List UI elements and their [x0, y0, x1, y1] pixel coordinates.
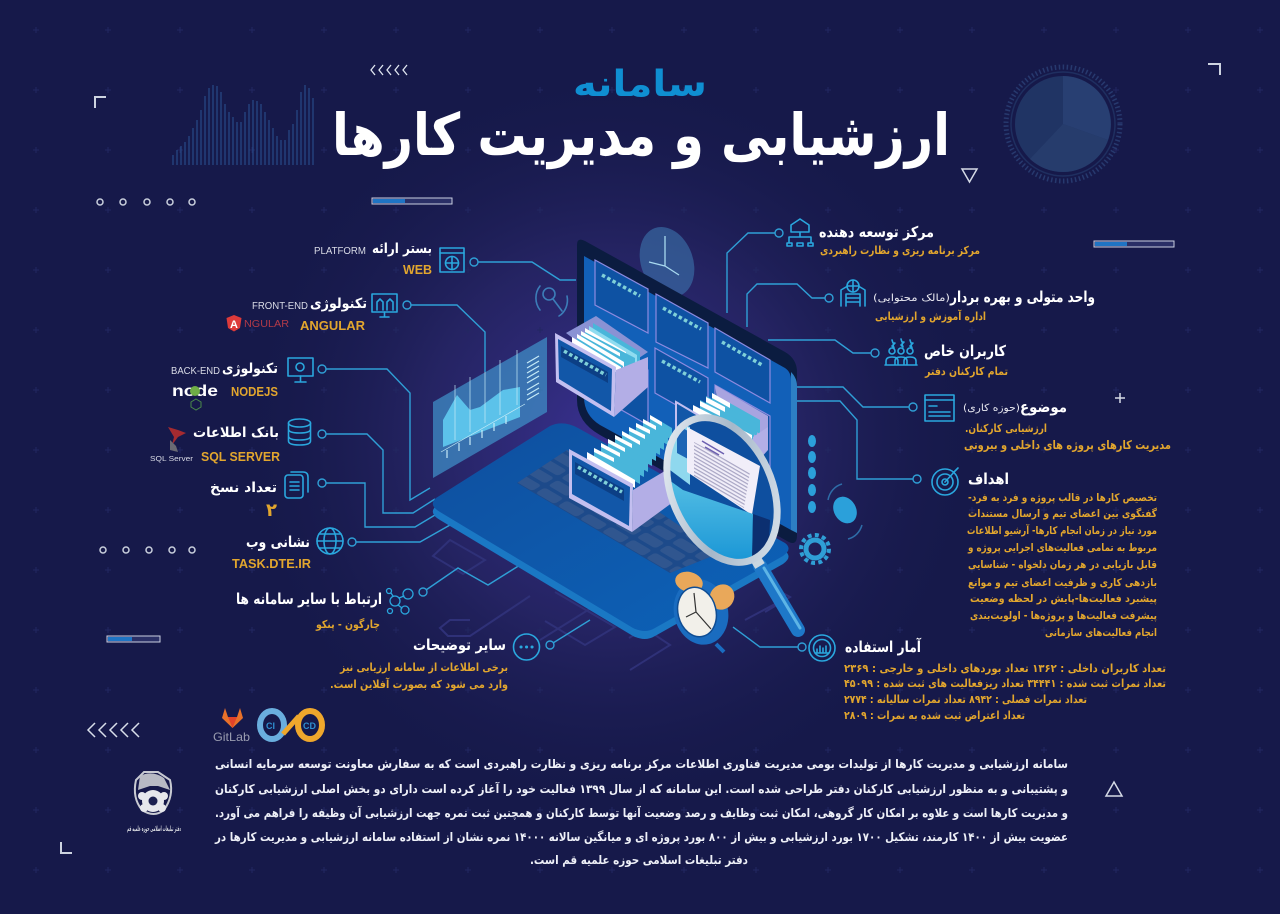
item: usage stats [809, 635, 1166, 722]
icon: documents [285, 472, 308, 498]
icon: dots circle [514, 634, 540, 660]
decorative progress bar right [1094, 241, 1174, 247]
item: front-end: تکنولوژی [310, 296, 367, 312]
magnifier handle [754, 556, 800, 630]
item: subject [925, 395, 1171, 453]
item: integration: چارگون - پنکو [315, 618, 380, 631]
decorative pie gauge [1006, 67, 1120, 181]
decorative corner top left [95, 97, 106, 108]
item: other notes: وارد می شود که بصورت آفلاین است. [330, 677, 508, 691]
item: developer center: مرکز برنامه ریزی و نظارت راهبردی [820, 244, 980, 257]
keyboard [517, 450, 720, 573]
logo: gitlab: GitLab [213, 730, 250, 744]
decorative triangle [962, 169, 977, 182]
goals text [967, 492, 1158, 639]
body paragraph [214, 757, 1068, 868]
title: main: ارزشیابی و مدیریت کارها [332, 101, 950, 170]
item: versions: تعداد نسخ [210, 480, 277, 496]
item: versions: ۲ [266, 500, 277, 521]
item: platform: بستر ارائه [372, 241, 432, 257]
goals text: مربوط به تمامی فعالیت‌های اجرایی پروژه و [967, 542, 1157, 554]
item: other notes: سایر توضیحات [413, 636, 506, 654]
body paragraph: و پشتیبانی و به منظور ارزشیابی کارکنان دفتر طراحی شده است. این سامانه که از سال ۱۳۹۹ فعالیت خود را آغاز کرده است دارای دو بخش اصلی ارزشیابی کارکنان [215, 781, 1068, 797]
item: goals [932, 468, 1158, 639]
item: subject: ارزشیابی کارکنان. [965, 422, 1047, 435]
magnifier lens [663, 414, 781, 566]
item: database: SQL SERVER [201, 449, 281, 464]
item: owner unit: اداره آموزش و ارزشیابی [875, 309, 986, 323]
item: web address: TASK.DTE.IR [232, 556, 312, 571]
logo: angular [226, 315, 289, 332]
item: platform [314, 241, 464, 277]
goals text: مورد نیاز در زمان انجام کارها- آرشیو اطلاعات [967, 524, 1157, 537]
item: usage stats: آمار استفاده [845, 638, 922, 656]
decorative gear [801, 535, 829, 563]
decorative chevrons lower [88, 723, 139, 737]
item: owner unit: (مالک محتوایی) [873, 293, 950, 304]
body paragraph: عضویت بیش از ۱۴۰۰ کارمند، تشکیل ۱۷۰۰ بورد ارزشیابی و بیش از ۸۰۰ بورد پروژه ای و میانگین سالانه ۱۴۰۰۰ نمره نشان از استفاده سامانه ارزشیابی و مدیریت کارها در [214, 830, 1068, 845]
decorative corner top right [1208, 64, 1220, 75]
wall clock [630, 219, 704, 305]
item: back-end [171, 358, 313, 410]
item: back-end: BACK-END [171, 366, 220, 377]
goals text: بازدهی کاری و ظرفیت اعضای تیم و موانع [968, 577, 1157, 589]
logo: seminary emblem [127, 772, 181, 833]
logo: angular: NGULAR [244, 319, 289, 330]
icon: target [932, 468, 958, 495]
item: subject: موضوع [1020, 398, 1067, 416]
chart panel [433, 337, 547, 478]
icon: stats dial [809, 635, 835, 661]
laptop [433, 240, 800, 652]
goals text: تخصیص کارها در قالب پروژه و فرد به فرد- [968, 492, 1157, 504]
body paragraph: و مدیریت کارها است و علاوه بر امکان کار گروهی، امکان ثبت وظایف و رصد وضعیت آنها توسط کارکنان و همچنین ثبت نمره جهت ارزشیابی آن وظیفه را فراهم می آورد. [215, 805, 1068, 821]
decorative dots top [97, 199, 195, 205]
item: special users [885, 339, 1008, 378]
item: versions [210, 472, 308, 521]
decorative plus [1115, 393, 1125, 403]
logo: gitlab [213, 708, 250, 744]
item: integration: ارتباط با سایر سامانه ها [236, 590, 382, 608]
item: database: بانک اطلاعات [193, 425, 279, 441]
decorative corner bottom [61, 842, 72, 853]
laptop base [433, 423, 789, 639]
goals text: انجام فعالیت‌های سازمانی [1045, 627, 1157, 639]
item: web address: نشانی وب [246, 533, 310, 551]
item: owner unit [841, 280, 1095, 323]
logo: angular: A [230, 319, 238, 331]
stats text: تعداد نمرات ثبت شده : ۳۴۴۴۱ تعداد ریزفعالیت های ثبت شده : ۴۵۰۹۹ [844, 677, 1166, 690]
item: integration [236, 588, 413, 631]
icon: org chart [787, 219, 813, 246]
laptop screen [577, 240, 797, 543]
icon: gear monitor [288, 358, 313, 382]
logo: ci cd: CI [266, 721, 275, 731]
item: back-end: تکنولوژی [222, 361, 278, 377]
icon: web window [440, 248, 464, 272]
item: special users: کاربران خاص [924, 342, 1006, 360]
icon: database [288, 419, 310, 445]
logo: node: node [172, 383, 218, 400]
icon: network [386, 588, 413, 614]
icon: globe [317, 528, 343, 554]
item: front-end: FRONT-END [252, 301, 308, 312]
goals text: پیشبرد فعالیت‌ها-پایش در لحظه وضعیت [970, 593, 1157, 605]
logo: ci cd [260, 711, 322, 739]
stats text: تعداد کاربران داخلی : ۱۳۶۲ تعداد بوردهای داخلی و خارجی : ۲۳۶۹ [844, 662, 1166, 675]
item: developer center: مرکز توسعه دهنده [819, 223, 934, 241]
decorative small magnifier [536, 286, 567, 316]
logo: node [172, 383, 218, 410]
body paragraph: دفتر تبلیغات اسلامی حوزه علمیه قم است. [530, 853, 748, 868]
decorative bar chart [173, 85, 313, 165]
upper drawer [555, 316, 648, 417]
goals text: پیشرفت فعالیت‌ها و پروژه‌ها - اولویت‌بندی [970, 610, 1157, 622]
item: back-end: NODEJS [231, 385, 278, 399]
item: other notes: برخی اطلاعات از سامانه ارزیابی نیز [339, 661, 508, 674]
lower right drawer [676, 385, 768, 490]
text: دفتر تبلیغات اسلامی حوزه علمیه قم [127, 825, 181, 833]
stats text: تعداد اعتراض ثبت شده به نمرات : ۲۸۰۹ [844, 709, 1025, 722]
connector lines [318, 229, 921, 651]
item: special users: تمام کارکنان دفتر [924, 365, 1008, 378]
decorative triangle bottom [1106, 782, 1122, 796]
decorative progress bar top [372, 198, 452, 204]
item: developer center [787, 219, 980, 257]
goals text: قابل بازیابی در هر زمان دلخواه - شناسایی [968, 559, 1157, 571]
title: system: سامانه [573, 64, 707, 105]
decorative dots lower [100, 547, 195, 553]
goals text: گفتگوی بین اعضای تیم و ارسال مستندات [968, 507, 1158, 520]
decorative chevrons top [371, 65, 407, 75]
icon: users [885, 339, 917, 365]
body paragraph: سامانه ارزشیابی و مدیریت کارها از تولیدات بومی مدیریت فناوری اطلاعات مرکز برنامه ریزی و نظارت راهبردی است که به سفارش معاونت توسعه سرمایه انسانی [215, 757, 1068, 772]
item: platform: WEB [403, 262, 432, 277]
icon: monitor [372, 294, 397, 317]
logo: sql server: SQL Server [150, 454, 194, 463]
stats text: تعداد نمرات فصلی : ۸۹۴۲ تعداد نمرات سالیانه : ۲۷۷۴ [844, 693, 1087, 706]
item: platform: PLATFORM [314, 246, 366, 257]
alarm clock [667, 569, 739, 652]
decorative progress bar lower [107, 636, 160, 642]
icon: code window [925, 395, 954, 421]
lower left drawer [569, 415, 680, 532]
stats text [844, 662, 1166, 722]
logo: sql server [150, 427, 194, 463]
item: web address [232, 528, 343, 571]
item: front-end: ANGULAR [300, 318, 366, 333]
item: subject: مدیریت کارهای پروژه های داخلی و بیرونی [964, 438, 1171, 453]
item: database [150, 419, 310, 464]
decorative dots beside laptop [808, 435, 816, 513]
item: goals: اهداف [968, 470, 1009, 488]
item: other notes [330, 634, 540, 691]
item: owner unit: واحد متولی و بهره بردار [949, 288, 1095, 306]
item: front-end [226, 294, 397, 333]
icon: garage globe [841, 280, 865, 306]
item: subject: (حوزه کاری) [963, 403, 1020, 414]
logo: ci cd: CD [303, 721, 316, 731]
faint circuit floor [433, 540, 790, 670]
decorative cloud orbit [828, 484, 862, 539]
screen panels [595, 260, 770, 470]
